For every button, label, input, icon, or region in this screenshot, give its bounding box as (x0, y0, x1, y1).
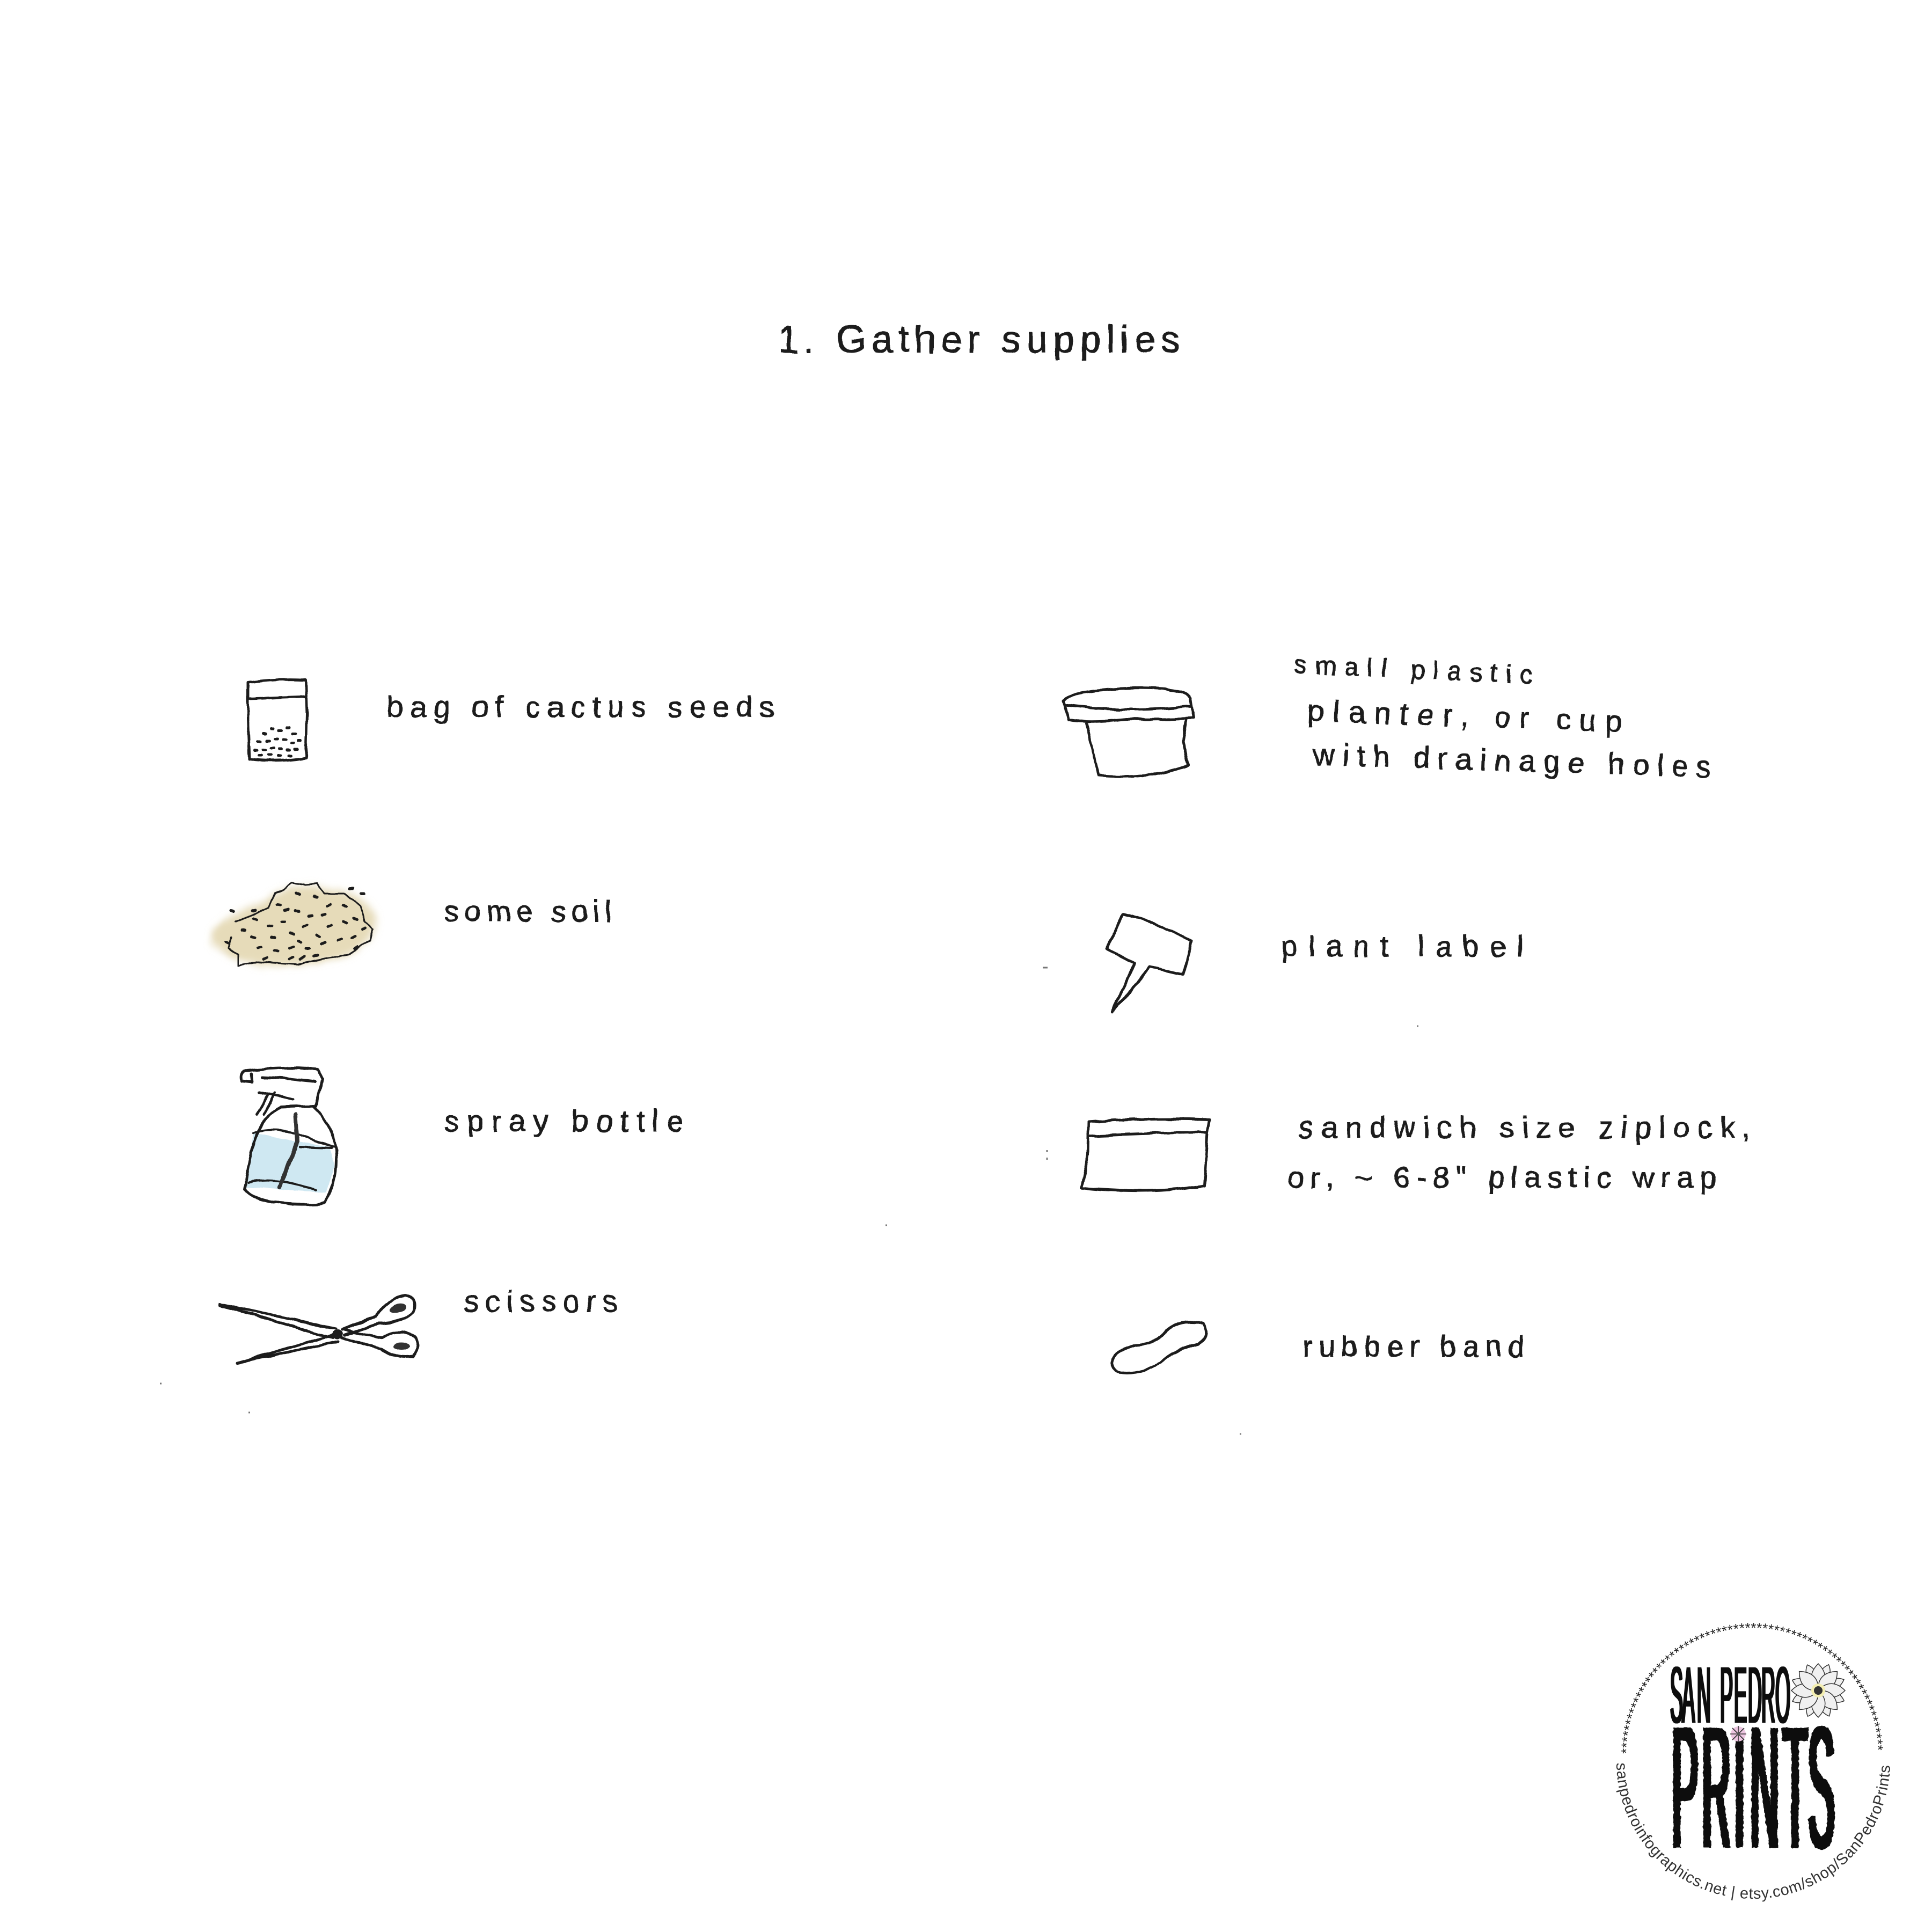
icon: spray bottle (241, 1068, 336, 1204)
label: bag of cactus seeds: bag of cactus seeds (386, 690, 774, 723)
item: scissors (220, 1284, 618, 1363)
label: ziplock text: sandwich size ziplock, (1299, 1110, 1751, 1144)
item: spray bottle (241, 1068, 683, 1204)
item: planter (1063, 650, 1711, 784)
logo: star arc: ******************************************************************** (1621, 1623, 1883, 1754)
label: scissors: scissors (464, 1284, 618, 1318)
item: rubber band (1112, 1322, 1525, 1373)
stray specks (160, 968, 1418, 1434)
icon: plant label (1107, 914, 1191, 1012)
logo: PRINTS: PRINTS (1672, 1690, 1835, 1885)
icon: soil pile (212, 883, 376, 966)
icon: planter (1063, 689, 1194, 777)
item: plant label (1107, 914, 1524, 1012)
icon: ziplock bag (1081, 1119, 1210, 1191)
title: 1. Gather supplies (778, 318, 1180, 361)
label: planter text (1293, 650, 1711, 784)
label: spray bottle: spray bottle (444, 1104, 683, 1138)
label: ziplock text (1287, 1110, 1751, 1194)
logo: website arc text: sanpedroinfographics.net | etsy.com/shop/SanPedroPrints (1616, 1763, 1890, 1902)
label: some soil: some soil (444, 894, 611, 928)
label: planter text: with drainage holes (1312, 737, 1711, 784)
label: planter text: small plastic (1293, 650, 1533, 689)
icon: seed bag (248, 679, 307, 760)
label: rubber band: rubber band (1302, 1329, 1525, 1363)
item: soil (212, 883, 611, 966)
icon: pink flower (1730, 1726, 1746, 1742)
logo: SAN PEDRO: SAN PEDRO (1670, 1650, 1790, 1740)
logo: San Pedro Prints (1616, 1623, 1890, 1902)
item: ziplock (1081, 1110, 1751, 1194)
icon: white flower (1790, 1663, 1846, 1718)
label: plant label: plant label (1281, 929, 1524, 963)
label: planter text: planter, or cup (1307, 693, 1622, 738)
icon: rubber band (1112, 1322, 1207, 1373)
item: bag of cactus seeds (248, 679, 774, 760)
icon: scissors (220, 1296, 418, 1363)
label: ziplock text: or, ~ 6-8" plastic wrap (1287, 1160, 1717, 1194)
